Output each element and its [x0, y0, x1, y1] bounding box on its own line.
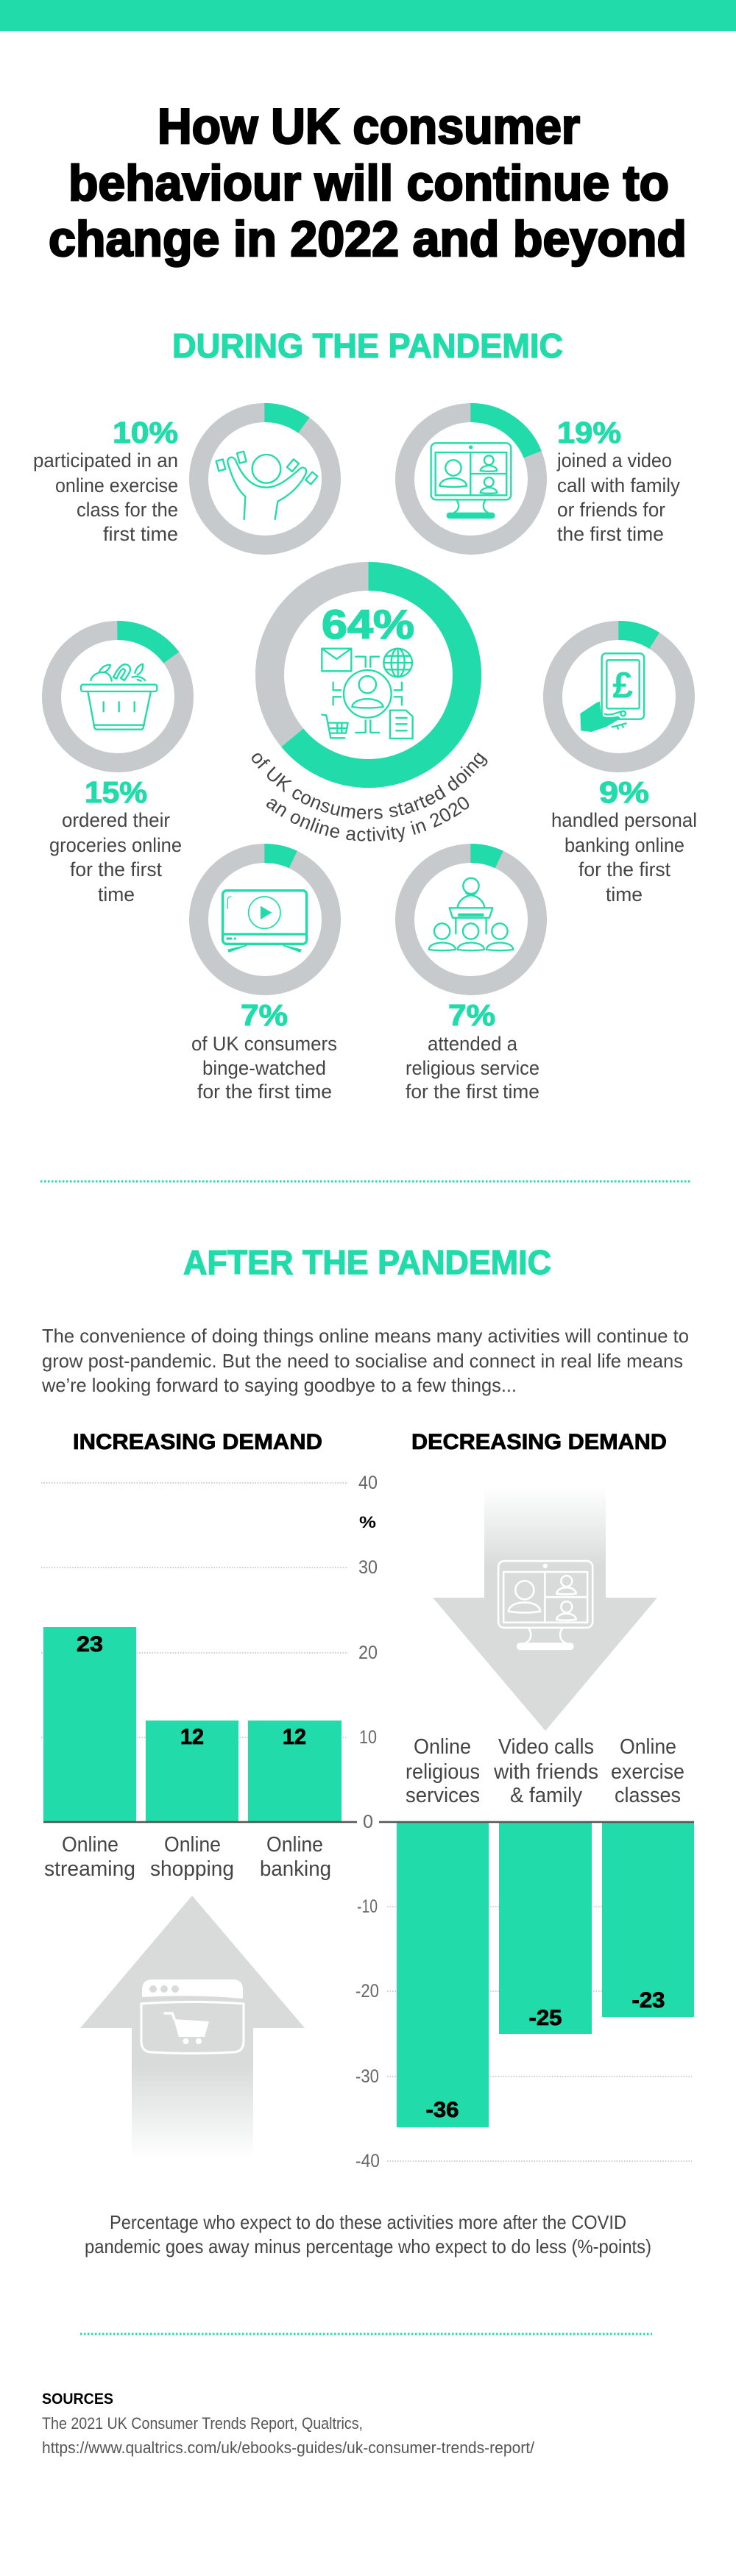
axis labels: 10	[359, 1727, 377, 1748]
intro text: we’re looking forward to saying goodbye to a few things...	[41, 1374, 517, 1396]
bar chart: decreasing demand	[397, 1735, 694, 2127]
sources	[42, 2391, 535, 2457]
sources: SOURCES	[42, 2391, 113, 2408]
icon: white video monitor	[498, 1561, 592, 1650]
bar chart: increasing demand: 12	[283, 1725, 306, 1749]
bar chart: decreasing demand: -25	[528, 2006, 562, 2030]
bar chart: decreasing demand: Online	[620, 1735, 676, 1759]
panel: 19% video call: the first time	[557, 523, 664, 545]
panel: 7% religious service: religious service	[406, 1057, 539, 1079]
icon: television with play button	[223, 891, 307, 953]
panel: 7% religious service	[405, 853, 539, 1103]
bar chart: decreasing demand: & family	[510, 1784, 582, 1807]
bar chart: decreasing demand: exercise	[611, 1760, 684, 1784]
panel: 9% banking: banking online	[565, 834, 684, 856]
bar chart: decreasing demand: -23	[631, 1988, 665, 2013]
axis labels: 40	[358, 1473, 378, 1493]
intro text	[41, 1325, 689, 1396]
axis labels: 20	[358, 1643, 378, 1663]
panel: 19% video call	[405, 413, 680, 545]
bar chart: increasing demand: Online	[164, 1833, 221, 1857]
bar chart: increasing demand: Online	[266, 1833, 323, 1857]
axis labels: 30	[358, 1557, 378, 1578]
panel: 15% groceries	[49, 630, 184, 905]
subheading: increasing demand: INCREASING DEMAND	[73, 1430, 322, 1454]
intro text: grow post-pandemic. But the need to socialise and connect in real life means	[42, 1350, 683, 1372]
axis labels: -10	[357, 1896, 378, 1917]
icon: hand holding phone with pound sign	[580, 653, 644, 732]
title: How UK consumer	[158, 99, 580, 154]
icon: white browser with shopping cart	[141, 1979, 244, 2054]
panel: 7% religious service: for the first time	[406, 1081, 539, 1103]
bar chart: decreasing demand: services	[406, 1784, 480, 1807]
panel: 10% online exercise: online exercise	[55, 474, 178, 497]
curved caption: an online activity in 2020	[266, 797, 470, 843]
title: behaviour will continue to	[68, 155, 669, 211]
panel: 19% video call: 19%	[557, 416, 621, 449]
panel: 9% banking: time	[606, 883, 643, 905]
panel: 7% religious service: 7%	[448, 998, 495, 1032]
bar chart: decreasing demand: classes	[615, 1784, 681, 1807]
panel: 15% groceries: time	[98, 883, 135, 905]
panel: 9% banking	[551, 630, 697, 905]
panel: 19% video call: joined a video	[556, 449, 672, 472]
panel: 15% groceries: ordered their	[62, 809, 170, 831]
panel: 7% religious service: attended a	[428, 1033, 518, 1055]
bar chart: increasing demand: banking	[260, 1857, 331, 1881]
panel: 9% banking: for the first	[578, 858, 670, 880]
panel: 7% binge-watched: of UK consumers	[191, 1033, 337, 1055]
panel: 9% banking: 9%	[599, 775, 649, 809]
panel: 64% central statistic: 64%	[322, 601, 414, 647]
panel: 19% video call: call with family	[557, 474, 680, 497]
panel: 10% online exercise: first time	[103, 523, 178, 545]
heading: after the pandemic: AFTER THE PANDEMIC	[183, 1243, 551, 1281]
chart caption: Percentage who expect to do these activities more after the COVID	[110, 2211, 626, 2233]
icon: online activities cluster	[322, 649, 413, 739]
sources: https://www.qualtrics.com/uk/ebooks-guides/uk-consumer-trends-report/	[42, 2438, 535, 2457]
bar chart: decreasing demand: with friends	[493, 1760, 598, 1784]
panel: 10% online exercise: class for the	[77, 499, 178, 521]
top green band	[0, 0, 736, 31]
icon: hand holding phone with pound sign: £	[612, 664, 633, 705]
title	[49, 99, 687, 267]
bar chart: decreasing demand: religious	[406, 1760, 480, 1784]
bar chart: increasing demand: shopping	[150, 1857, 234, 1881]
panel: 7% binge-watched	[191, 853, 337, 1103]
sources: The 2021 UK Consumer Trends Report, Qualtrics,	[42, 2414, 363, 2433]
curved caption: of UK consumers started doing	[252, 752, 487, 819]
axis labels	[355, 1473, 380, 2171]
bar chart: decreasing demand: Online	[414, 1735, 471, 1759]
bar chart: increasing demand: 12	[180, 1725, 204, 1749]
panel: 9% banking: handled personal	[551, 809, 697, 831]
panel: 7% binge-watched: 7%	[241, 998, 288, 1032]
axis labels: -20	[355, 1981, 379, 2002]
subheading: decreasing demand: DECREASING DEMAND	[411, 1430, 667, 1454]
panel: 19% video call: or friends for	[557, 499, 665, 521]
bar chart: increasing demand: 23	[77, 1632, 103, 1657]
bar chart: increasing demand: Online	[62, 1833, 118, 1857]
arrow: decreasing, down with monitor icon	[433, 1486, 657, 1731]
icon: grocery basket	[81, 664, 157, 730]
chart caption: pandemic goes away minus percentage who expect to do less (%-points)	[85, 2235, 651, 2257]
heading: during the pandemic: DURING THE PANDEMIC	[172, 327, 563, 365]
panel: 15% groceries: for the first	[70, 858, 162, 880]
title: change in 2022 and beyond	[49, 211, 687, 267]
panel: 64% central statistic	[252, 562, 487, 843]
panel: 15% groceries: groceries online	[49, 834, 182, 856]
panel: 15% groceries: 15%	[85, 775, 147, 809]
panel: 10% online exercise: participated in an	[33, 449, 178, 472]
axis labels: 0	[363, 1812, 373, 1832]
chart caption	[85, 2211, 651, 2257]
axis labels: %	[359, 1513, 376, 1531]
icon: speaker at pulpit with audience	[429, 878, 513, 950]
axis labels: -40	[355, 2151, 380, 2171]
arrow: increasing, up with shopping icon	[80, 1896, 305, 2159]
bar chart: decreasing demand: -36	[425, 2098, 459, 2122]
panel: 7% binge-watched: for the first time	[197, 1081, 332, 1103]
icon: video call monitor	[431, 443, 511, 519]
bar chart: increasing demand: streaming	[44, 1857, 135, 1881]
bar chart: increasing demand	[43, 1627, 342, 1881]
icon: person with raised arms	[216, 452, 317, 519]
axis labels: -30	[355, 2066, 379, 2087]
panel: 10% online exercise: 10%	[113, 416, 178, 449]
panel: 10% online exercise	[33, 413, 331, 545]
panel: 7% binge-watched: binge-watched	[202, 1057, 326, 1079]
bar chart: decreasing demand: Video calls	[498, 1735, 594, 1759]
intro text: The convenience of doing things online means many activities will continue to	[42, 1325, 689, 1347]
